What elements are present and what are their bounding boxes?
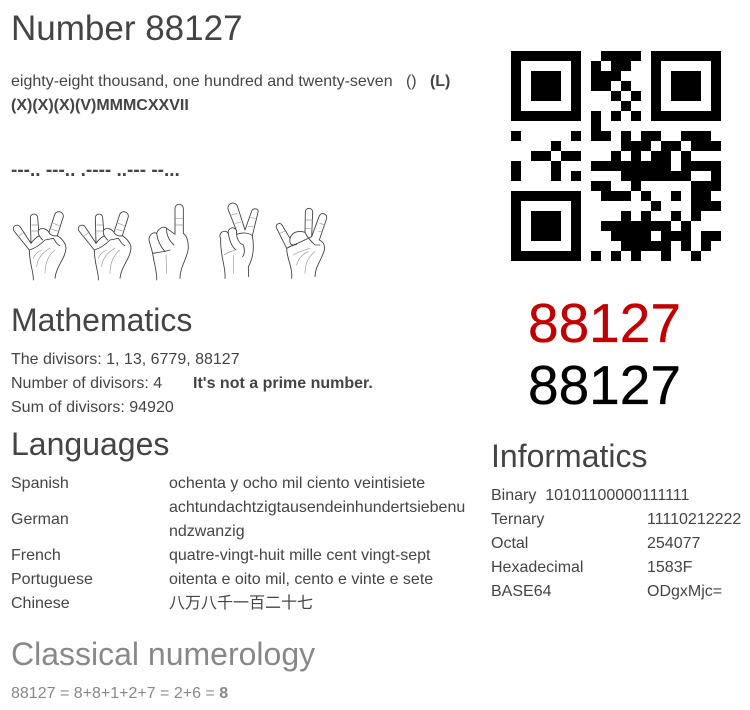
text block: numerology sum: 88127 = 8+8+1+2+7 = 2+6 = 8	[11, 685, 228, 702]
panel: informatics table: BASE64	[491, 583, 551, 600]
panel: languages table: 八万八千一百二十七	[169, 595, 313, 612]
black number image: 88127	[528, 354, 681, 416]
panel: languages table: French	[11, 547, 61, 564]
panel: informatics table: 254077	[647, 535, 700, 552]
panel: informatics table: 11110212222	[647, 511, 741, 528]
icon: hand digit 2	[220, 203, 258, 278]
panel: mathematics facts	[11, 351, 373, 416]
text block: number in words and roman numeral	[11, 73, 450, 114]
panel: languages table: ochenta y ocho mil ciento veintisiete	[169, 475, 425, 492]
panel: informatics table: Octal	[491, 535, 528, 552]
icon: hand digit 1	[149, 204, 188, 280]
panel: mathematics facts: It's not a prime number.	[193, 375, 373, 392]
panel: languages table: Portuguese	[11, 571, 93, 588]
panel: languages table: achtundachtzigtausendeinhundertsiebenu	[169, 499, 465, 516]
icon: sign language hands	[12, 202, 328, 280]
panel: informatics table: Binary 10101100000111111	[491, 487, 689, 504]
panel: informatics table: ODgxMjc=	[647, 583, 722, 600]
panel: languages table: oitenta e oito mil, cento e vinte e sete	[169, 571, 433, 588]
panel: languages table: quatre-vingt-huit mille cent vingt-sept	[169, 547, 430, 564]
heading: Mathematics: Mathematics	[11, 302, 192, 338]
data modules	[511, 51, 721, 261]
panel: languages table: Chinese	[11, 595, 70, 612]
panel: informatics table	[491, 487, 741, 600]
heading: Classical numerology: Classical numerology	[11, 636, 315, 672]
icon: hand digit 8	[78, 212, 131, 280]
panel: mathematics facts: Sum of divisors: 94920	[11, 399, 174, 416]
red number image: 88127	[528, 292, 681, 354]
QR code	[511, 51, 721, 261]
finder patterns	[511, 51, 721, 261]
panel: informatics table: Hexadecimal	[491, 559, 583, 576]
panel: languages table: ndzwanzig	[169, 523, 245, 540]
heading: Informatics: Informatics	[491, 438, 647, 474]
text block: number in words and roman numeral: (X)(X)(X)(V)MMMCXXVII	[11, 97, 189, 114]
heading: Languages: Languages	[11, 426, 169, 462]
title: Number 88127	[11, 9, 243, 48]
panel: languages table: Spanish	[11, 475, 69, 492]
panel: informatics table: 1583F	[647, 559, 692, 576]
icon: hand digit 8	[13, 212, 66, 280]
text block: number in words and roman numeral: eighty-eight thousand, one hundred and twenty-seven () (L)	[11, 73, 450, 90]
panel: languages table	[11, 475, 465, 612]
panel: languages table: German	[11, 511, 69, 528]
panel: mathematics facts: The divisors: 1, 13, 6779, 88127	[11, 351, 240, 368]
morse code: ---.. ---.. .---- ..--- --...	[11, 160, 180, 181]
panel: informatics table: Ternary	[491, 511, 544, 528]
panel: mathematics facts: Number of divisors: 4	[11, 375, 162, 392]
icon: hand digit 7	[276, 208, 327, 278]
